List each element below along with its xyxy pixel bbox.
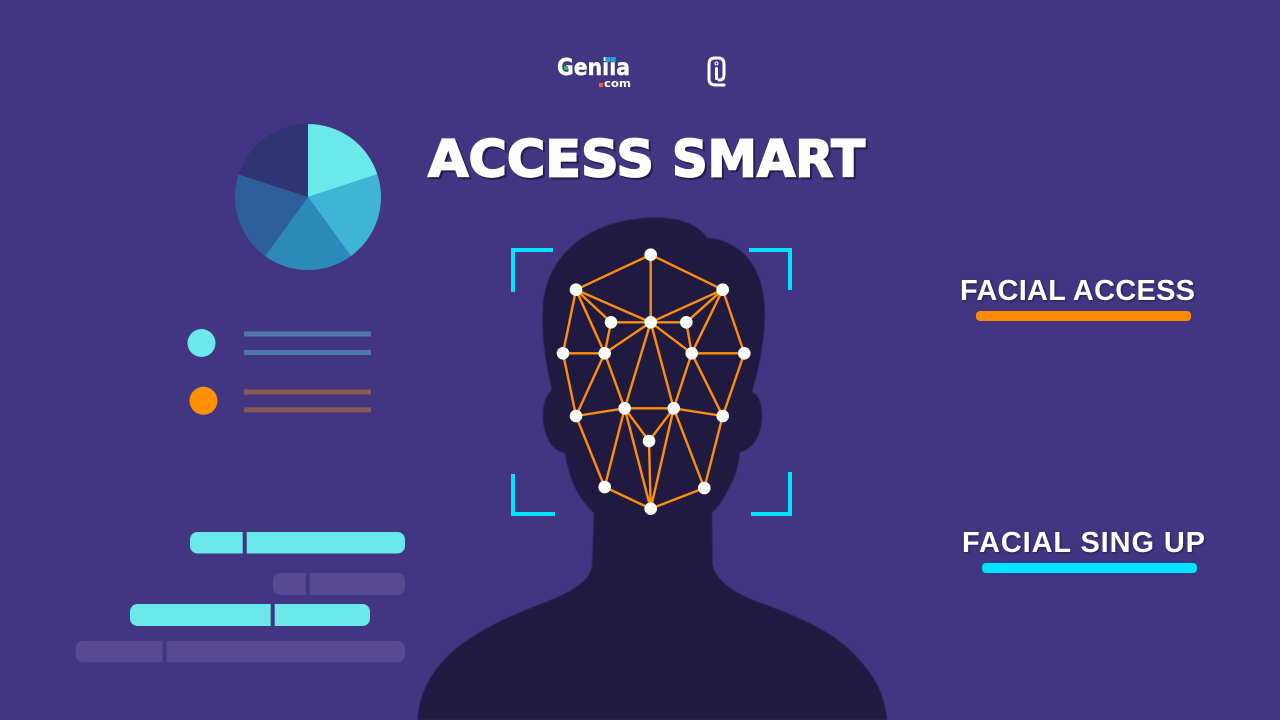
title	[428, 130, 865, 190]
logo: Geniia.com: com	[604, 77, 631, 90]
logo: Geniia.com: Geniia	[557, 53, 630, 81]
title: ACCESS	[428, 130, 654, 190]
bar: cyan top	[190, 532, 405, 554]
mesh lines	[563, 255, 744, 509]
label: facial sing up: FACIAL SING UP	[962, 527, 1205, 559]
bar: cyan third	[130, 604, 370, 626]
scan frame brackets	[513, 250, 790, 514]
bar: muted second	[273, 573, 405, 595]
silhouette of person	[418, 218, 887, 720]
logo: Geniia.com	[557, 53, 631, 90]
legend: orange item	[190, 387, 371, 415]
bar chart	[76, 532, 405, 662]
pie chart	[235, 124, 381, 270]
label: facial sing up	[962, 527, 1205, 573]
label: facial access: FACIAL ACCESS	[960, 275, 1195, 307]
icon: paperclip logo	[709, 58, 724, 85]
mesh nodes	[557, 248, 751, 515]
bar: muted bottom	[76, 641, 405, 662]
legend: cyan item	[188, 329, 371, 357]
label: facial access	[960, 275, 1195, 321]
title: SMART	[672, 130, 865, 190]
face mesh	[557, 248, 751, 515]
